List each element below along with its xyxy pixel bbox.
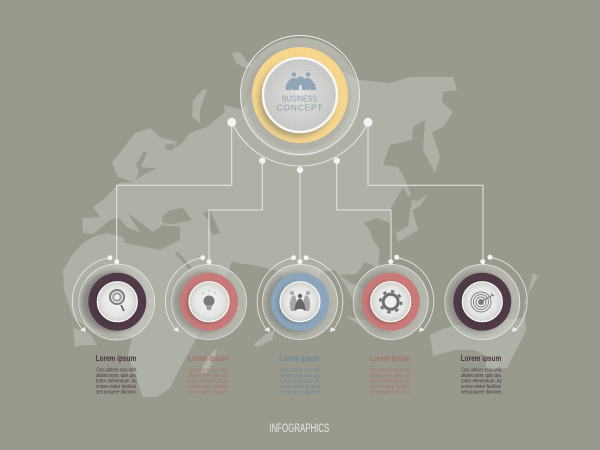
text block 5: conse ctetur facilisis — [461, 384, 501, 390]
white plate — [263, 58, 337, 132]
icon: target — [471, 292, 494, 312]
text block 4: conse ctetur facilisis — [370, 384, 410, 390]
text block 4: Lorem ipsum — [370, 354, 410, 363]
text block 3: tortor elementum. Ac — [280, 378, 321, 384]
node 1: search — [72, 255, 155, 340]
world map — [63, 52, 538, 397]
text block 5: ullamcorper, quis gra, — [461, 373, 502, 379]
node 3: team — [257, 255, 343, 340]
text block 2: Lorem ipsum — [188, 354, 228, 363]
text block 3: ullamcorper, quis gra, — [280, 373, 321, 379]
text block 5 — [461, 354, 502, 396]
text block 5: sed posuere diamom. — [461, 390, 502, 396]
node 2: idea — [165, 255, 246, 340]
text block 5: tortor elementum. Ac — [461, 378, 502, 384]
connector nodes — [227, 118, 372, 173]
icon: business people — [286, 72, 316, 90]
footer title: INFOGRAPHICS — [269, 423, 330, 435]
text block 3: sed posuere diamom. — [280, 390, 321, 396]
text block 3: Lorem ipsum — [279, 354, 320, 363]
text block 1 — [96, 354, 137, 396]
icon: team — [290, 291, 310, 311]
text block 1: tortor elementum. Ac — [96, 378, 137, 384]
text block 1: conse ctetur facilisis — [96, 384, 136, 390]
text block 2: sed posuere diamom. — [188, 390, 229, 396]
text block 1: Cras ultrices eros velit, — [96, 368, 137, 374]
label: business concept: BUSINESS — [282, 94, 317, 104]
central circle: business concept — [240, 36, 360, 156]
text block 2: tortor elementum. Ac — [188, 378, 229, 384]
icon: light bulb — [202, 290, 216, 310]
text block 5: Lorem ipsum — [461, 354, 501, 363]
icon: magnifier — [110, 290, 124, 311]
text block 2: conse ctetur facilisis — [188, 384, 228, 390]
text block 4: sed posuere diamom. — [370, 390, 411, 396]
text block 1: ullamcorper, quis gra, — [96, 373, 137, 379]
node 4: settings — [353, 255, 434, 340]
text block 4: Cras ultrices eros velit, — [370, 368, 411, 374]
text block 4: tortor elementum. Ac — [370, 378, 411, 384]
icon: gear — [380, 291, 401, 312]
text block 2: Cras ultrices eros velit, — [188, 368, 229, 374]
connector lines — [117, 122, 483, 262]
text block 3: Cras ultrices eros velit, — [280, 368, 321, 374]
text block 2: ullamcorper, quis gra, — [188, 373, 229, 379]
text block 4: ullamcorper, quis gra, — [370, 373, 411, 379]
text block 1: sed posuere diamom. — [96, 390, 137, 396]
text block 4 — [370, 354, 411, 396]
text block 3: conse ctetur facilisis — [280, 384, 320, 390]
text block 3 — [279, 354, 321, 396]
yellow disc — [252, 47, 348, 143]
text block 2 — [188, 354, 229, 396]
text block 1: Lorem ipsum — [96, 354, 136, 363]
seas — [90, 143, 380, 284]
text block 5: Cras ultrices eros velit, — [461, 368, 502, 374]
node 5: target — [445, 255, 527, 340]
central circle: business concept: CONCEPT — [276, 102, 322, 112]
